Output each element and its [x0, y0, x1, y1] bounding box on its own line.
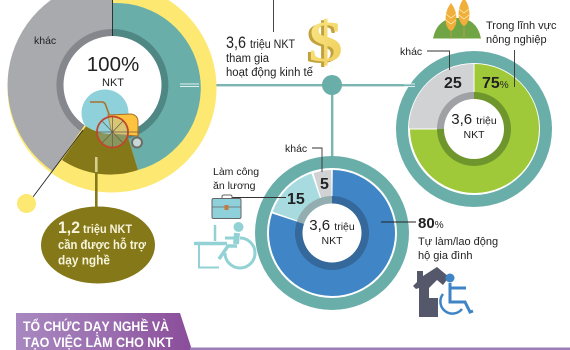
double line end on agriculture ring	[404, 84, 415, 87]
leader for khác	[427, 51, 450, 70]
label: 75%: 75%	[482, 75, 509, 92]
center label: 3,6 triệu	[309, 217, 355, 234]
icon: briefcase	[212, 195, 241, 218]
icon: house with wheelchair	[413, 267, 473, 317]
callout: 1,2 triệu NKT	[41, 206, 155, 284]
label: Làm công ăn lương: ăn lương	[213, 180, 256, 192]
icon: dollar sign: $	[306, 10, 340, 75]
text: 3,6 triệu NKT tham gia hoạt động kinh tế: tham gia	[226, 53, 270, 65]
text: 3,6 triệu NKT tham gia hoạt động kinh tế	[226, 33, 314, 79]
icon: wheat on hill	[433, 0, 481, 39]
black divider in donut	[112, 0, 114, 36]
banner: heading: TẠO VIỆC LÀM CHO NKT	[23, 333, 173, 350]
center label: NKT: NKT	[322, 235, 343, 247]
chart: agriculture donut	[396, 51, 552, 207]
yellow dot	[17, 194, 36, 213]
double line on teal ring	[180, 84, 199, 87]
label: khác (employment): khác	[285, 143, 307, 155]
chart: 100% NKT donut	[8, 0, 216, 192]
callout: 1,2 triệu NKT: triệu NKT	[83, 224, 132, 236]
icon: wheelchair	[90, 102, 142, 148]
center label: 3,6 triệu	[451, 111, 497, 128]
leader for 80%	[381, 221, 416, 223]
callout line to dot	[33, 130, 83, 197]
text: Trong lĩnh vực nông nghiệp	[486, 20, 557, 46]
black line above heading	[272, 0, 274, 32]
callout: 1,2 triệu NKT: 1,2	[58, 218, 80, 237]
text: 3,6 triệu NKT tham gia hoạt động kinh tế: hoạt động kinh tế	[226, 67, 314, 79]
text: 3,6 triệu NKT tham gia hoạt động kinh tế: 3,6	[226, 33, 246, 52]
callout: 1,2 triệu NKT: dạy nghề	[58, 254, 110, 268]
banner: heading: TỔ CHỨC DẠY NGHỀ VÀ	[23, 317, 169, 334]
label: khác (agriculture): khác	[400, 46, 422, 58]
leader for 5%	[312, 148, 322, 172]
icon: desk worker in wheelchair	[194, 222, 255, 268]
callout: 1,2 triệu NKT: cần được hỗ trợ	[58, 237, 146, 252]
label: Làm công ăn lương: Làm công	[213, 166, 259, 178]
label: 80%: 80%	[418, 215, 444, 232]
connector lines	[190, 84, 420, 163]
icon: dollar sign: $	[308, 9, 343, 74]
text: Tự làm/lao động hộ gia đình	[418, 236, 498, 262]
leader for 15%	[232, 196, 286, 198]
label: NKT: NKT	[102, 77, 124, 89]
label: 5: 5	[320, 176, 329, 193]
label: 100%: 100%	[87, 53, 139, 76]
text: Tự làm/lao động hộ gia đình: Tự làm/lao động	[418, 236, 498, 248]
leader for 75%	[514, 50, 516, 87]
label: Làm công ăn lương	[213, 166, 259, 192]
center label: NKT: NKT	[464, 129, 485, 141]
text: 3,6 triệu NKT tham gia hoạt động kinh tế: triệu NKT	[250, 39, 295, 51]
text: Tự làm/lao động hộ gia đình: hộ gia đình	[418, 250, 472, 262]
olive connector	[95, 157, 98, 209]
label: khác: khác	[34, 35, 56, 47]
text: Trong lĩnh vực nông nghiệp: nông nghiệp	[486, 34, 547, 46]
node circle	[322, 75, 342, 95]
label: 15: 15	[287, 191, 305, 208]
chart: employment donut	[255, 156, 409, 310]
label: 25: 25	[444, 75, 462, 92]
banner: heading	[16, 313, 570, 350]
text: Trong lĩnh vực nông nghiệp: Trong lĩnh vực	[486, 20, 557, 32]
